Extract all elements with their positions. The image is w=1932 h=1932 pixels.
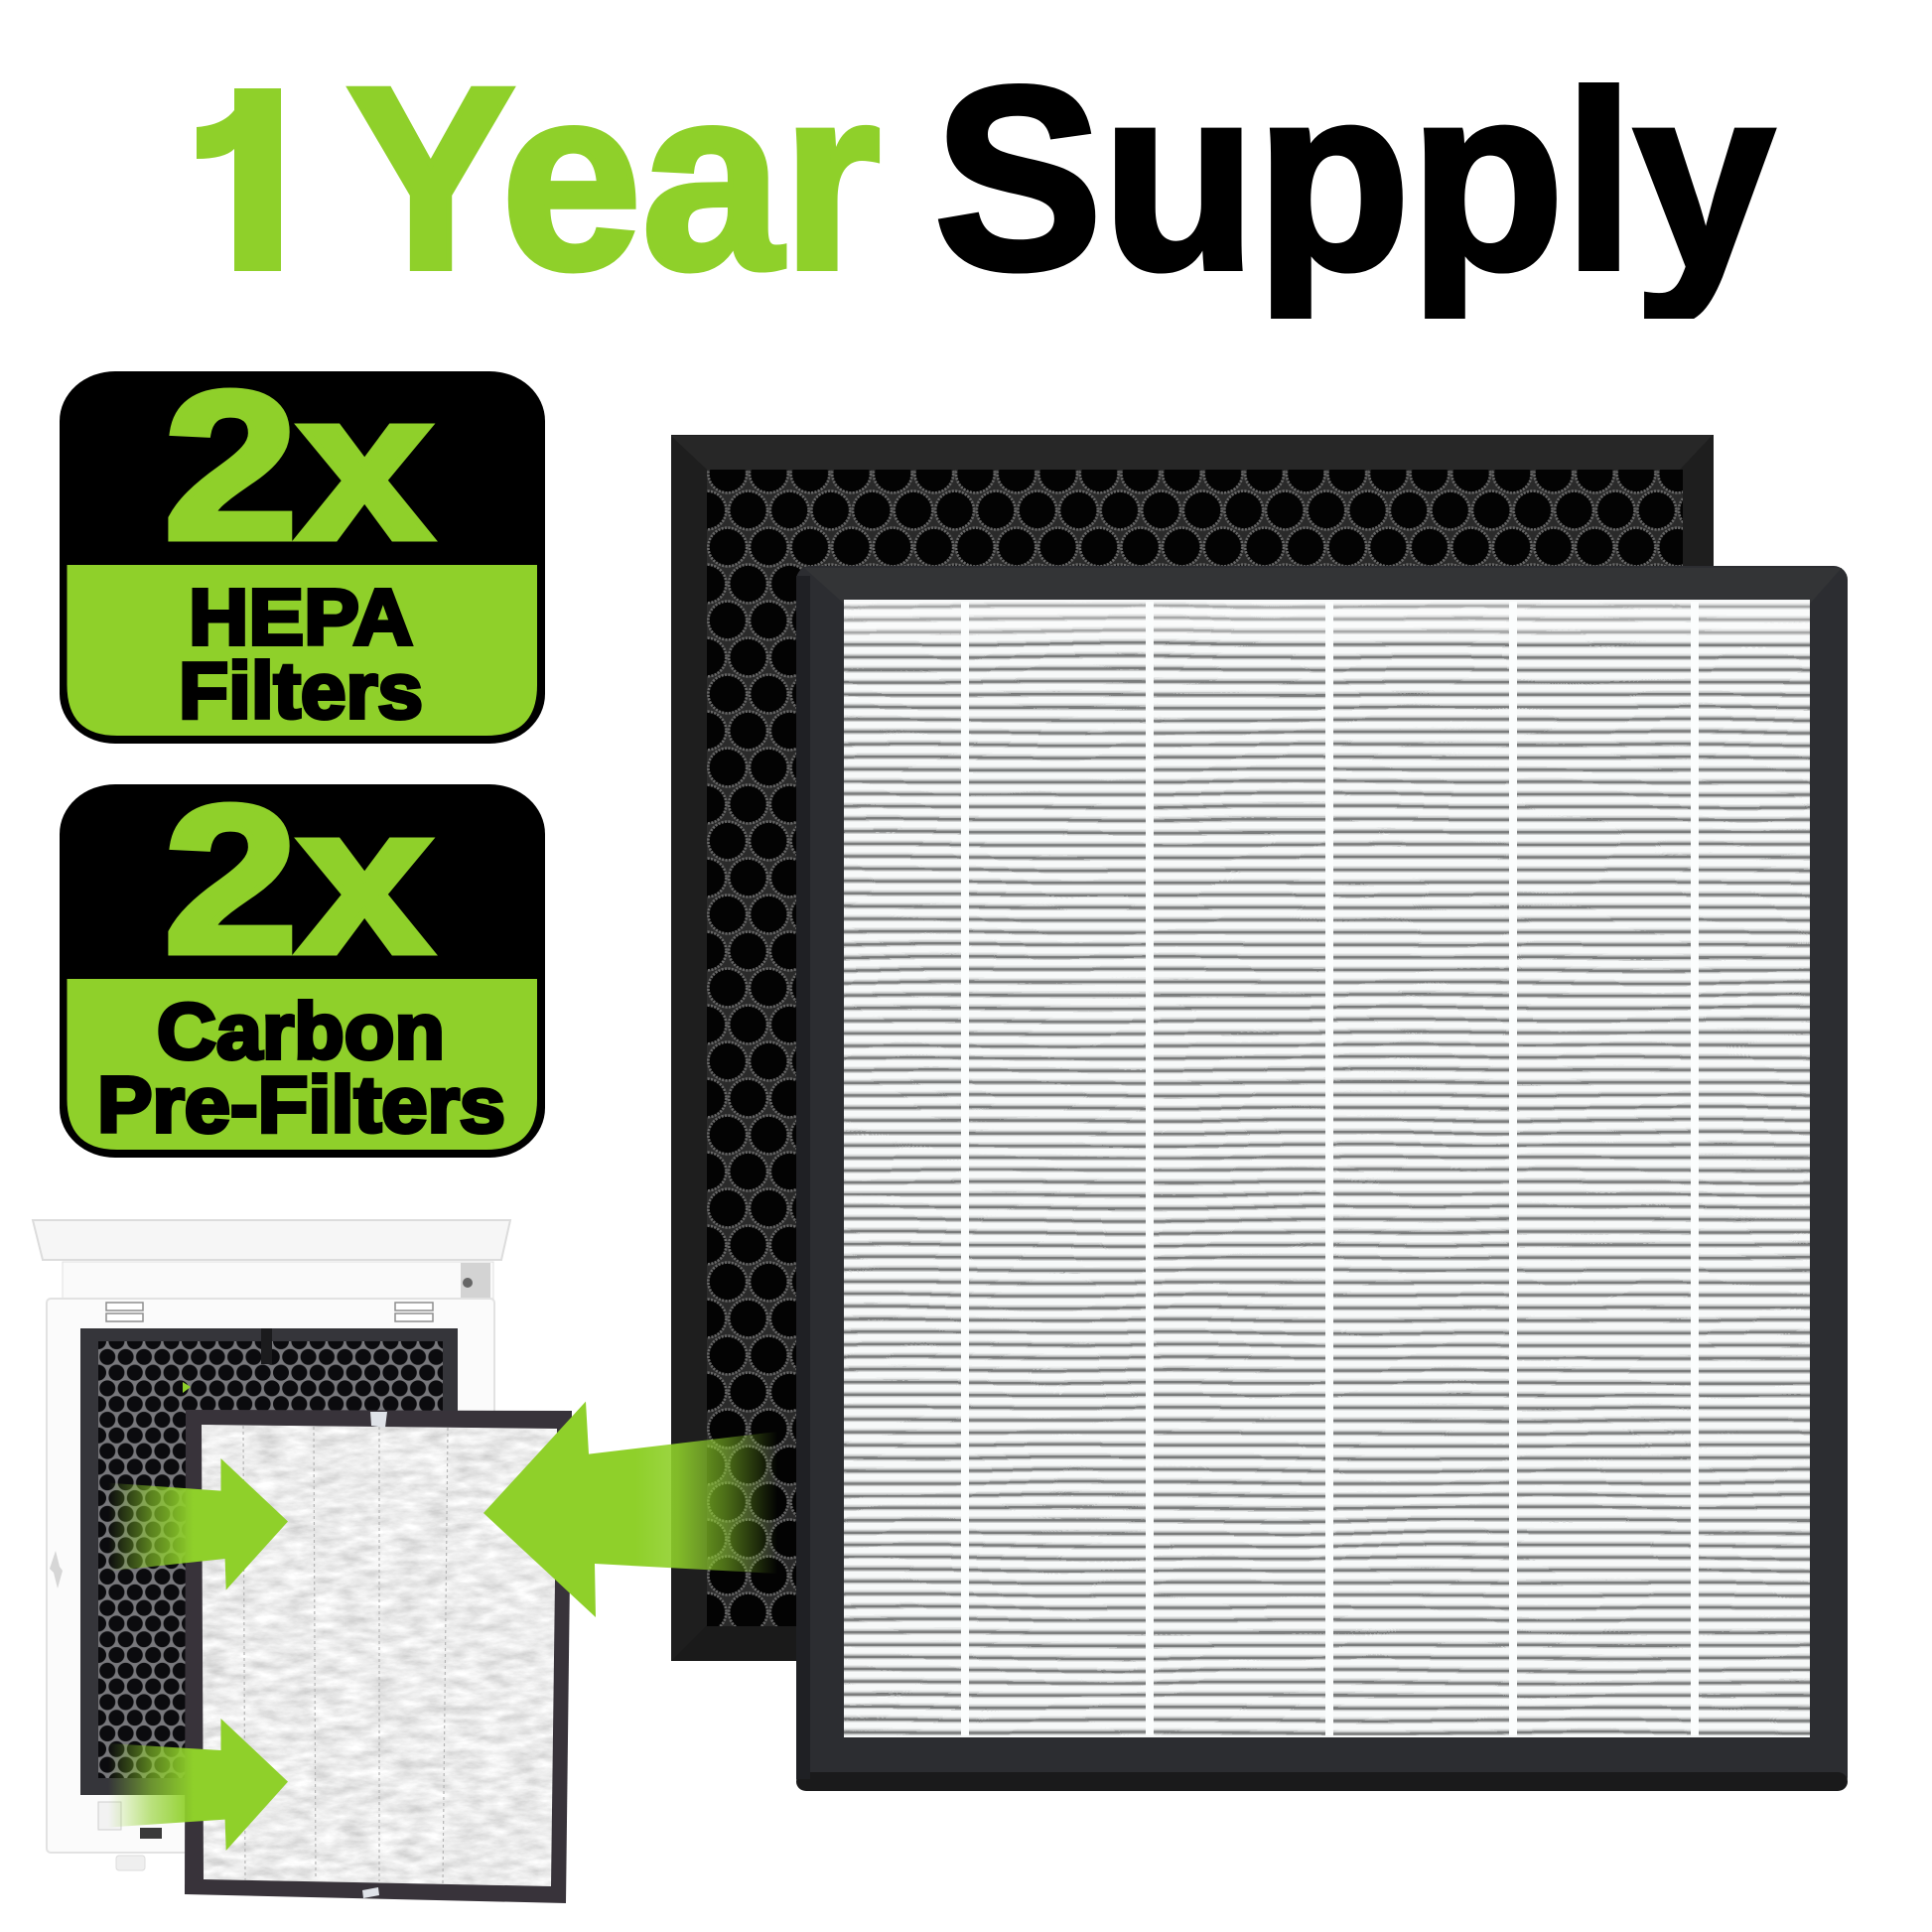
badge label line 1: Carbon [157,987,445,1075]
arrow: large left-pointing [483,1402,777,1617]
lower hardware [98,1802,121,1830]
badge label line 2: Filters [179,646,423,735]
carbon pre-filter, large [671,435,1714,1661]
pre-filter fabric [202,1425,557,1886]
purifier foot [116,1856,145,1870]
purifier top cap [33,1220,510,1260]
title [197,82,1777,319]
badge label line 1: HEPA [189,573,413,661]
honeycomb mesh [707,470,1683,1626]
arrow: lower right-pointing [108,1719,288,1851]
pre-filter sheet [185,1410,572,1903]
purifier neck [63,1262,493,1300]
installed carbon filter [80,1328,458,1795]
badge: 2x Carbon Pre-Filters [60,761,545,1158]
title: numeral 1 [197,88,281,271]
HEPA filter, large [796,566,1848,1791]
vents left [106,1303,143,1321]
title: Year: Year [346,33,881,324]
badge label line 2: Pre-Filters [97,1060,505,1149]
filter pull tabs [370,1412,387,1428]
vents right [395,1303,433,1321]
badge: 2x HEPA Filters [60,347,545,744]
pleated media [834,592,1820,1745]
air purifier with filter being inserted [33,1220,572,1903]
badge count: 2x [164,761,432,997]
arrow: upper right-pointing [108,1458,288,1590]
purifier body [47,1299,494,1853]
badge count: 2x [164,347,432,583]
side latch [50,1551,63,1588]
title: numeral 1: 1 [171,30,319,328]
title: Supply: Supply [934,33,1776,325]
